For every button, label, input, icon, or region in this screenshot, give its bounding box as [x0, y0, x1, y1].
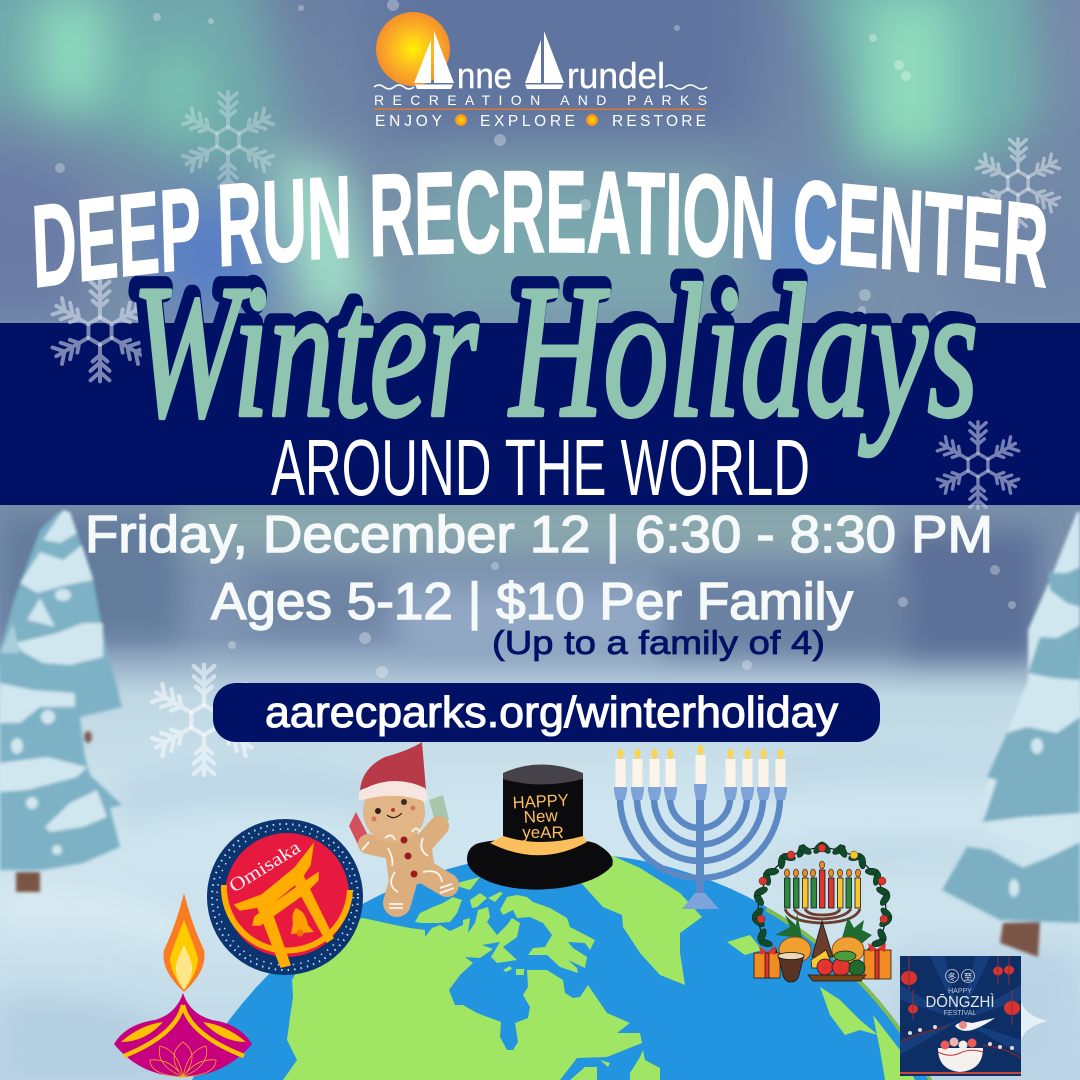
globe land: mainland: [283, 907, 642, 1080]
logo sun: [376, 12, 450, 86]
badge orange arc: [224, 885, 350, 951]
heading: Winter Holidays: [127, 243, 978, 457]
badge red disc: [225, 833, 349, 957]
logo tagline: EXPLORE: [480, 113, 575, 130]
kinara flames: [784, 861, 860, 877]
hat brim: [467, 840, 613, 890]
gift boxes: [754, 950, 891, 979]
hat greeting: New: [523, 806, 559, 827]
icon: Dongzhi festival card: [900, 956, 1021, 1076]
logo waves: [374, 85, 707, 89]
family size note: (Up to a family of 4): [492, 624, 825, 661]
logo tagline: RESTORE: [612, 113, 706, 130]
gingerbread gifts: [349, 812, 373, 851]
card blossoms: [900, 1027, 1021, 1058]
website pill: aarecparks.org/winterholiday: [265, 688, 838, 737]
torii upper lintel: [235, 845, 313, 910]
pineapple leaves: [775, 913, 872, 945]
globe land: northern islands: [415, 877, 595, 973]
globe: [192, 850, 932, 1080]
card title: HAPPY: [948, 988, 972, 995]
menorah candles: [616, 755, 786, 787]
diya bands: [121, 1005, 246, 1056]
logo sailboats: [414, 31, 564, 89]
icon: diya oil lamp: [114, 893, 252, 1077]
menorah flames: [618, 745, 784, 759]
falling snow bokeh: [55, 0, 1016, 678]
kwanzaa wreath leaves: [750, 839, 894, 965]
santa hat: [360, 742, 426, 790]
card sunburst: [900, 956, 1021, 1055]
card seal characters: 至: [964, 972, 973, 982]
card background: [900, 956, 1021, 1076]
bell: [291, 908, 314, 934]
card title: [926, 988, 994, 1017]
gingerbread limbs: [368, 826, 447, 903]
kwanzaa wreath stem: [758, 848, 886, 939]
badge name: Omisaka: [226, 837, 305, 897]
icon: gingerbread man: [349, 742, 454, 908]
logo name: nne: [457, 55, 512, 96]
menorah candle cups: [614, 784, 787, 800]
card title: DŌNGZHÌ: [926, 992, 994, 1011]
sparkle beside card: [1021, 1002, 1048, 1040]
logo tagline: [375, 113, 706, 130]
icon: Omisaka torii badge: [207, 819, 363, 975]
snowflake: top left: [182, 92, 274, 188]
card bowl: [938, 1048, 983, 1072]
logo name: rundel: [567, 55, 665, 96]
logo tagline dots: [455, 114, 598, 126]
globe land: small islands: [503, 935, 915, 1080]
menorah arms: [620, 790, 780, 895]
diya lotus: [150, 1042, 216, 1077]
ages and price: Ages 5-12 | $10 Per Family: [211, 573, 853, 631]
logo: Anne Arundel Recreation and Parks: [374, 12, 707, 130]
hat greeting: yeAR: [522, 823, 564, 842]
snowflake: right of band: [937, 422, 1019, 508]
gingerbread buttons and icing: [362, 828, 454, 908]
diya bowl: [114, 993, 252, 1077]
torii pillars: [235, 845, 333, 967]
hat band: [490, 836, 587, 855]
fruit plate: [808, 950, 866, 981]
kinara holder: [785, 909, 860, 923]
left pine tree: [0, 510, 122, 892]
icon: menorah: [614, 745, 787, 909]
gingerbread face: [372, 799, 416, 822]
diya flame outer: [163, 893, 205, 992]
hat crown: [503, 766, 583, 852]
logo subtitle: RECREATION AND PARKS: [374, 92, 707, 108]
heading: Deep Run Recreation Center: DEEP RUN RECREATION CENTER: [34, 170, 1046, 288]
wreath berries: [757, 844, 888, 923]
globe rim: [767, 908, 932, 1080]
icon: kinara and Kwanzaa harvest: [750, 839, 894, 982]
card seal characters: [946, 970, 974, 982]
card spoon: [955, 1018, 995, 1031]
card title: FESTIVAL: [944, 1010, 976, 1017]
card foot stripe: [900, 1072, 1021, 1074]
snowflake: lower left: [151, 665, 257, 775]
logo rule: [374, 108, 706, 110]
right pine trees: [942, 512, 1080, 957]
gingerbread head: [363, 781, 425, 843]
snowflake: top right: [976, 139, 1060, 227]
hat greeting: HAPPY: [512, 791, 569, 812]
diya flame middle: [170, 920, 198, 990]
pineapples: [779, 937, 864, 963]
card lanterns: [901, 966, 1020, 1015]
snowflake: left of band: [52, 281, 148, 381]
drum: [778, 955, 804, 982]
badge navy ring: [207, 819, 363, 975]
globe land: eastern peninsula: [582, 856, 702, 985]
gingerbread body: [383, 831, 437, 890]
navy title band: [0, 323, 1080, 505]
hat greeting: [512, 791, 569, 842]
event date and time: Friday, December 12 | 6:30 - 8:30 PM: [85, 506, 993, 564]
torii lower lintel: [253, 873, 318, 925]
diya flame inner: [176, 945, 192, 990]
badge speckles: [212, 824, 358, 970]
menorah base: [682, 893, 719, 909]
logo tagline: ENJOY: [375, 113, 442, 130]
kinara candles: [784, 870, 860, 908]
card seal characters: 冬: [948, 972, 957, 982]
icon: New Year top hat: [467, 764, 613, 890]
